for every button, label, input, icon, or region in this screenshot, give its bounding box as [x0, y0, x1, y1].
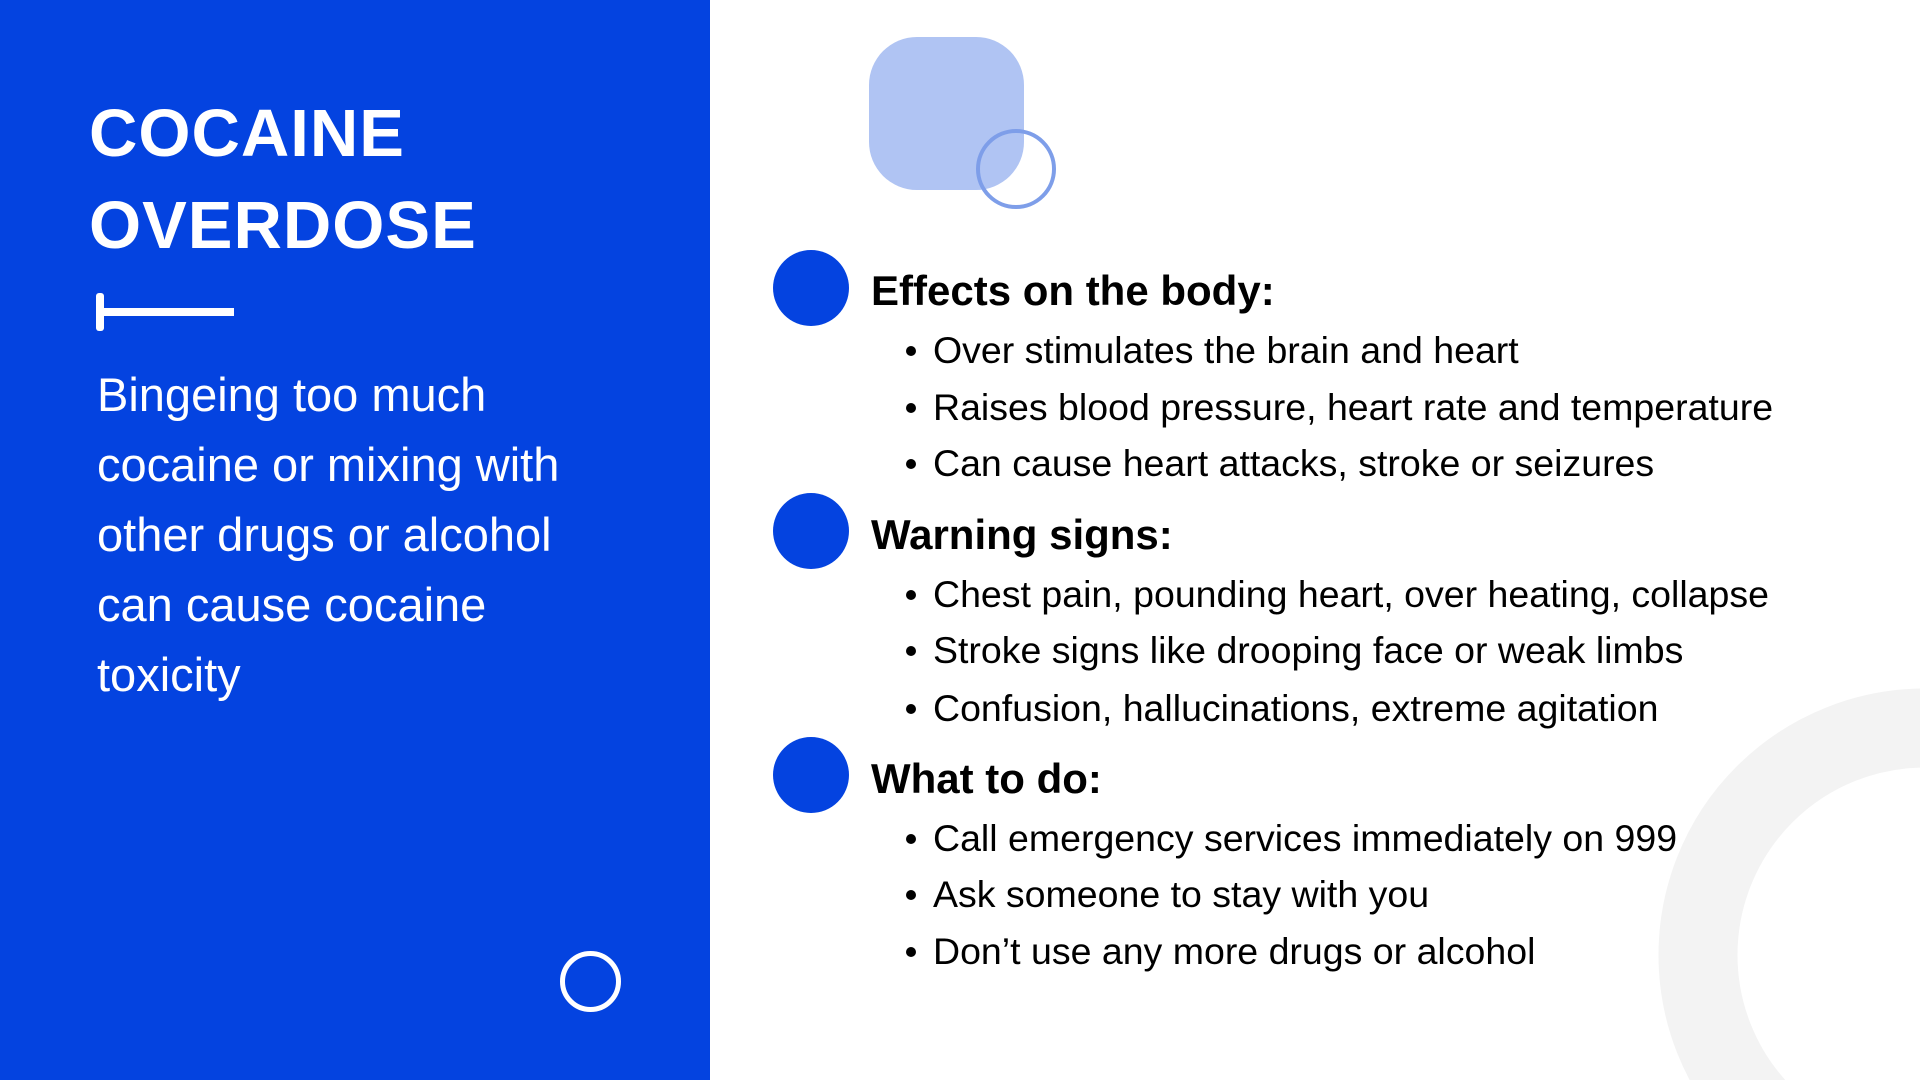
list: effects [906, 329, 1773, 484]
decoration: rounded square with circle [869, 37, 1056, 209]
intro text: toxicity [97, 648, 241, 701]
heading: warning: Warning signs: [871, 511, 1173, 558]
intro text: can cause cocaine [97, 578, 486, 631]
panel: left blue [0, 0, 710, 1080]
list: what to do: Don’t use any more drugs or alcohol [933, 930, 1535, 972]
list: warning: Confusion, hallucinations, extreme agitation [933, 687, 1658, 729]
list: warning [906, 573, 1769, 729]
list: effects: Can cause heart attacks, stroke or seizures [933, 442, 1654, 484]
icon: bullet circle 3 [773, 737, 849, 813]
intro text: cocaine or mixing with [97, 438, 559, 491]
icon: bullet circle 1 [773, 250, 849, 326]
list: effects: Over stimulates the brain and heart [933, 329, 1519, 371]
title [89, 96, 477, 263]
title: OVERDOSE [89, 188, 477, 263]
list: what to do: Call emergency services immediately on 999 [933, 817, 1677, 859]
title: COCAINE [89, 96, 405, 171]
intro text [97, 368, 559, 701]
list: warning: Stroke signs like drooping face or weak limbs [933, 629, 1683, 671]
icon: bullet circle 2 [773, 493, 849, 569]
intro text: Bingeing too much [97, 368, 486, 421]
heading: what to do: What to do: [871, 755, 1102, 802]
icon: outline circle [560, 951, 621, 1012]
list: warning: Chest pain, pounding heart, over heating, collapse [933, 573, 1769, 615]
title underline [96, 293, 234, 331]
intro text: other drugs or alcohol [97, 508, 552, 561]
list: what to do [906, 817, 1677, 972]
list: effects: Raises blood pressure, heart rate and temperature [933, 386, 1773, 428]
list: what to do: Ask someone to stay with you [933, 873, 1429, 915]
heading: effects: Effects on the body: [871, 267, 1275, 314]
